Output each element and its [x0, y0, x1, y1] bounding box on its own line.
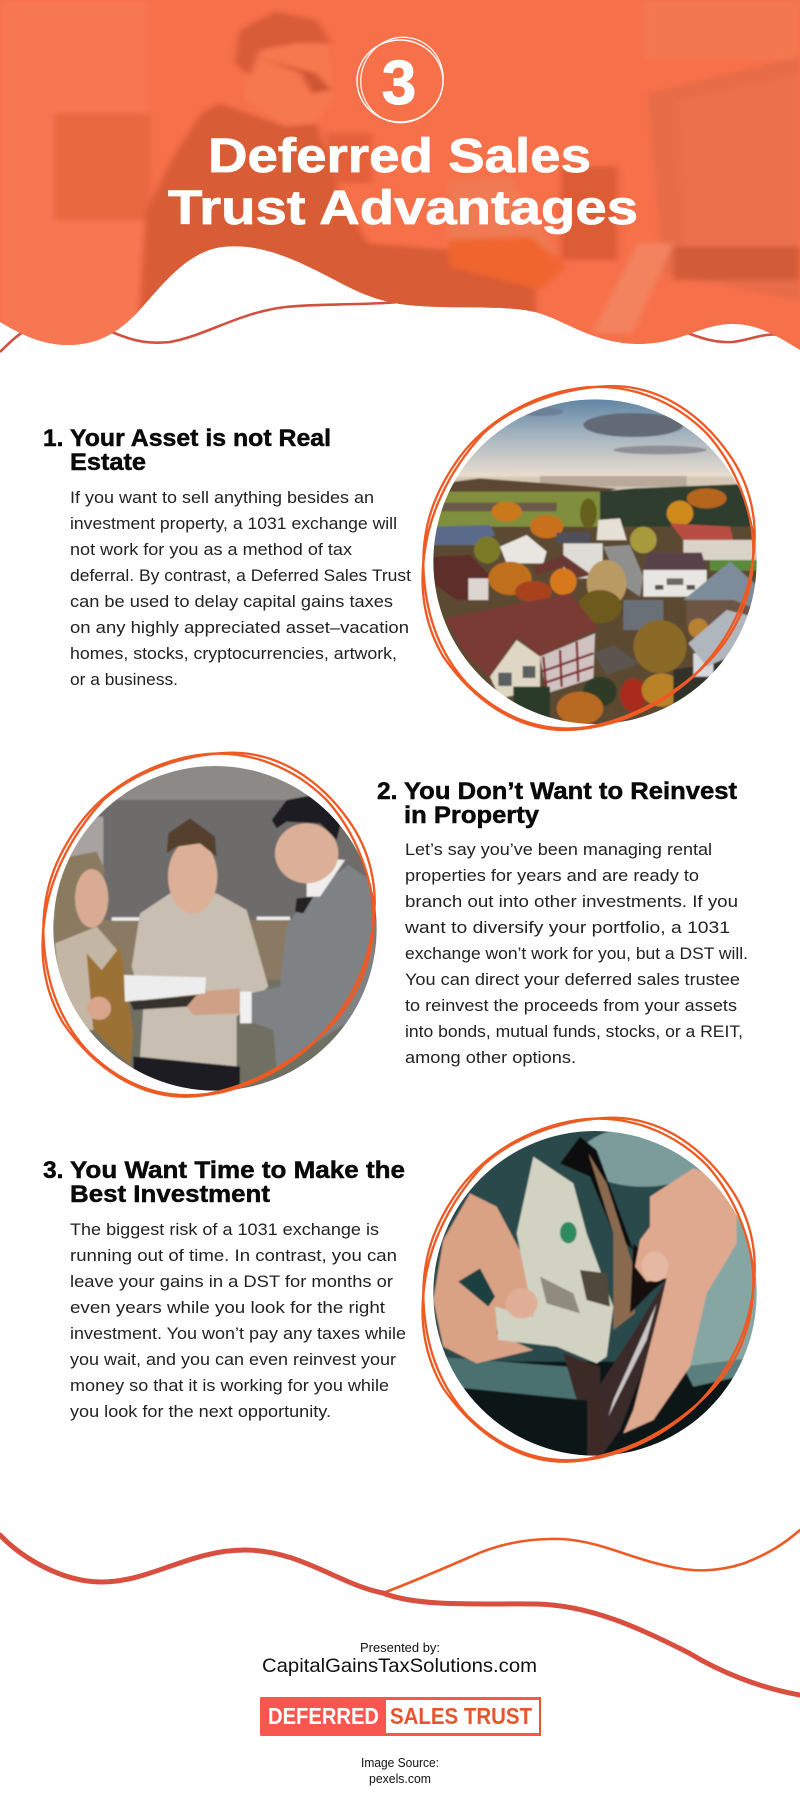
image source: Image Source: — [361, 1755, 439, 1770]
heading 1: Estate — [70, 449, 146, 476]
body 1: deferral. By contrast, a Deferred Sales Trust — [70, 566, 411, 585]
logo: Deferred Sales Trust — [260, 1697, 541, 1736]
body 2: into bonds, mutual funds, stocks, or a REIT, — [405, 1022, 743, 1041]
body 2 — [404, 840, 748, 1067]
body 1: can be used to delay capital gains taxes — [70, 592, 393, 611]
title: Trust Advantages — [168, 182, 638, 235]
heading 1 — [43, 425, 331, 476]
heading 1: Your Asset is not Real — [70, 425, 331, 452]
section 2 text — [377, 778, 748, 1067]
heading 2: 2. — [377, 778, 397, 805]
photo 3: hands with wallet and money — [423, 1118, 763, 1462]
heading 1: 1. — [43, 425, 63, 452]
body 2: want to diversify your portfolio, a 1031 — [404, 918, 730, 937]
body 2: to reinvest the proceeds from your assets — [405, 996, 737, 1015]
title: Deferred Sales — [208, 130, 591, 183]
heading 2: You Don’t Want to Reinvest — [404, 778, 737, 805]
heading 3 — [43, 1157, 405, 1208]
footer wave lines — [0, 1530, 800, 1695]
body 3 — [70, 1220, 406, 1421]
body 3: money so that it is working for you while — [70, 1376, 389, 1395]
presented by: CapitalGainsTaxSolutions.com — [262, 1655, 537, 1677]
image source — [361, 1755, 439, 1786]
body 1: not work for you as a method of tax — [70, 540, 353, 559]
title — [168, 130, 638, 235]
body 3: The biggest risk of a 1031 exchange is — [70, 1220, 379, 1239]
body 2: branch out into other investments. If you — [405, 892, 738, 911]
section 1 text — [43, 425, 411, 689]
body 1: If you want to sell anything besides an — [70, 488, 374, 507]
heading 3: You Want Time to Make the — [70, 1157, 405, 1184]
photo 1: village — [423, 386, 763, 730]
body 1: investment property, a 1031 exchange will — [70, 514, 397, 533]
photo 2: three people reviewing documents — [43, 753, 383, 1097]
header wave line — [0, 300, 800, 352]
body 1: or a business. — [70, 670, 178, 689]
body 1: homes, stocks, cryptocurrencies, artwork, — [70, 644, 397, 663]
body 2: exchange won’t work for you, but a DST will. — [405, 944, 748, 963]
body 2: among other options. — [405, 1048, 576, 1067]
number badge: 3 — [382, 49, 416, 118]
body 3: you wait, and you can even reinvest your — [70, 1350, 396, 1369]
body 3: leave your gains in a DST for months or — [70, 1272, 393, 1291]
heading 2 — [377, 778, 737, 829]
number badge — [349, 26, 455, 134]
body 2: properties for years and are ready to — [405, 866, 699, 885]
body 2: You can direct your deferred sales trustee — [405, 970, 740, 989]
body 3: investment. You won’t pay any taxes while — [70, 1324, 406, 1343]
logo: Deferred Sales Trust: DEFERRED — [268, 1703, 379, 1729]
section 3 text — [43, 1157, 406, 1421]
logo: Deferred Sales Trust: SALES TRUST — [390, 1703, 532, 1729]
body 2: Let’s say you’ve been managing rental — [405, 840, 712, 859]
body 1: on any highly appreciated asset–vacation — [70, 618, 409, 637]
heading 3: 3. — [43, 1157, 63, 1184]
header photo: office scene — [0, 0, 800, 360]
presented by: Presented by: — [360, 1641, 440, 1655]
header banner with orange photo — [0, 0, 800, 360]
body 3: running out of time. In contrast, you can — [70, 1246, 397, 1265]
image source: pexels.com — [369, 1771, 431, 1786]
presented by — [262, 1641, 537, 1677]
body 3: even years while you look for the right — [70, 1298, 385, 1317]
body 1 — [70, 488, 411, 689]
body 3: you look for the next opportunity. — [70, 1402, 331, 1421]
heading 3: Best Investment — [70, 1181, 270, 1208]
heading 2: in Property — [404, 802, 539, 829]
